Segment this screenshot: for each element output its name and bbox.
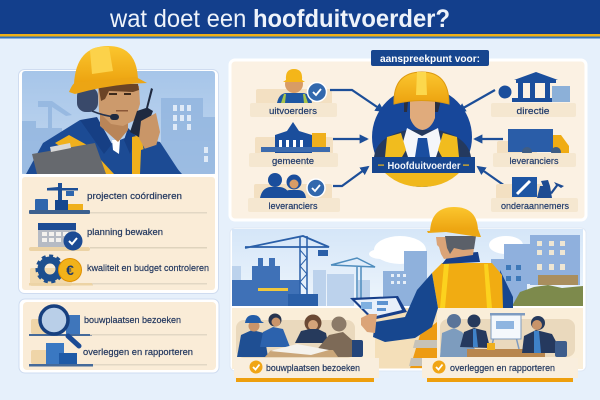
tablet (350, 296, 407, 320)
headset (77, 87, 98, 112)
contact: leveranciers left: leveranciers (268, 201, 318, 212)
right sleeve (500, 270, 513, 308)
task: bouwplaatsen bezoeken: bouwplaatsen bezoeken (84, 315, 181, 326)
contact: uitvoerders (250, 69, 337, 117)
hand (361, 314, 377, 333)
task: planning bewaken (29, 223, 207, 251)
caption: bouwplaatsen bezoeken (234, 358, 379, 382)
clipboard (32, 143, 106, 174)
task: projecten coördineren (29, 183, 207, 214)
heading: aanspreekpunt voor (371, 50, 489, 66)
contact: leveranciers right (493, 129, 576, 167)
title: wat doet een hoofduitvoerder? (109, 5, 450, 33)
arm (373, 273, 438, 342)
scene: presentation (440, 313, 575, 357)
helmet (430, 207, 478, 232)
panel: on site (230, 207, 586, 382)
worker portrait (26, 46, 182, 174)
distant crane (331, 258, 375, 298)
torso (26, 120, 181, 174)
name banner: Hoofduitvoerder (388, 161, 461, 172)
heading: aanspreekpunt voor: aanspreekpunt voor: (380, 53, 480, 65)
helmet (74, 46, 138, 84)
contact: directie (491, 72, 576, 117)
panel: left portrait and tasks (18, 46, 218, 294)
neck and face (100, 110, 128, 142)
contact: leveranciers right: leveranciers (510, 156, 559, 167)
task: projecten coördineren: projecten coórdineren (87, 191, 182, 202)
tasks panel (22, 177, 215, 290)
walkie talkie and hand (130, 88, 153, 139)
task: kwaliteit en budget controleren (29, 256, 209, 286)
caption: overleggen en rapporteren (422, 358, 578, 382)
tower crane (245, 236, 329, 298)
collar (442, 252, 480, 264)
panel: lower left tasks (19, 299, 219, 373)
safety trousers (410, 322, 437, 368)
task: kwaliteit en budget controleren: kwaliteit en budget controleren (87, 263, 209, 274)
caption: bouwplaatsen bezoeken: bouwplaatsen bezoeken (266, 363, 360, 374)
title banner (0, 0, 600, 38)
lower scenes background (232, 308, 436, 369)
task: overleggen en rapporteren: overleggen en rapporteren (83, 347, 193, 358)
contact: onderaannemers: onderaannemers (501, 201, 569, 212)
contact: gemeente (249, 122, 338, 167)
panel: aanspreekpunt (230, 50, 586, 220)
scene: meeting (236, 314, 363, 358)
contact: directie: directie (516, 106, 550, 117)
task: kwaliteit en budget controleren: € (66, 262, 74, 278)
contact: leveranciers left (248, 173, 340, 212)
caption: overleggen en rapporteren: overleggen en rapporteren (450, 363, 555, 374)
worker from behind (350, 207, 513, 368)
head (436, 237, 474, 259)
contact: uitvoerders: uitvoerders (269, 106, 317, 117)
central figure (372, 72, 475, 187)
contact: onderaannemers (491, 177, 578, 212)
vest (432, 263, 503, 308)
site skyline (232, 229, 583, 306)
portrait background (22, 71, 215, 174)
task: overleggen en rapporteren (29, 343, 207, 366)
arrows (330, 90, 505, 186)
task: bouwplaatsen bezoeken (29, 306, 207, 346)
contact: gemeente: gemeente (272, 156, 314, 167)
task: planning bewaken: planning bewaken (87, 227, 163, 238)
